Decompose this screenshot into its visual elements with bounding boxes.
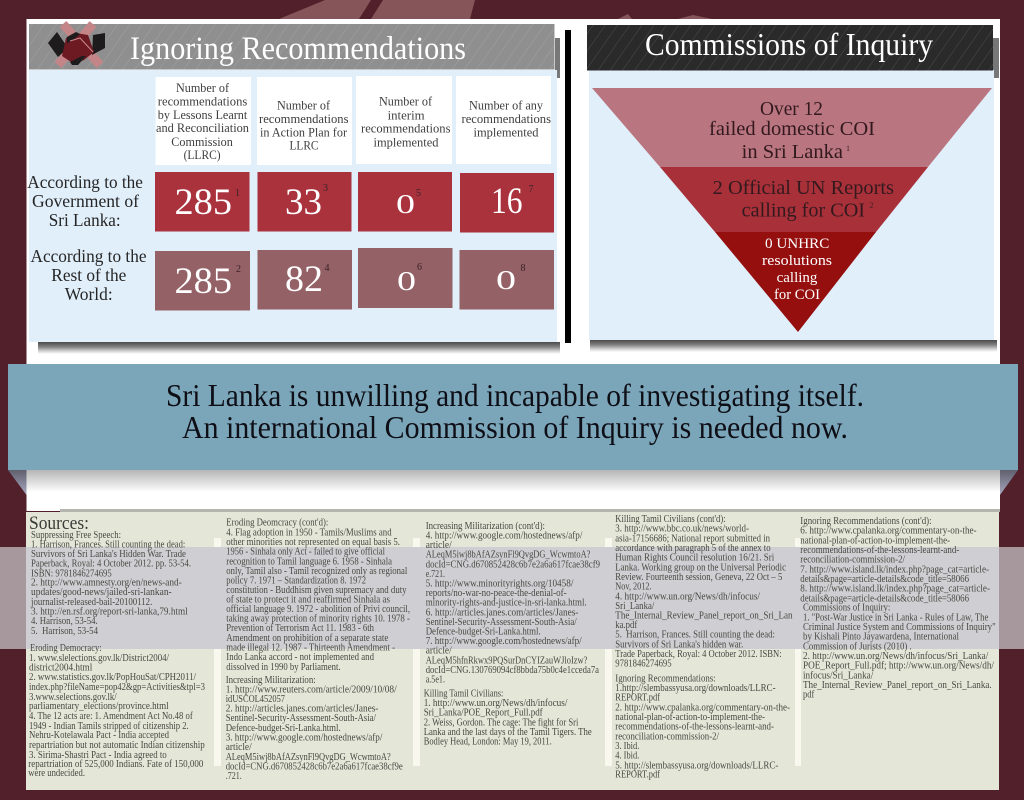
- sources column 3: minority-rights-and-justice-in-sri-lanka.html.: [426, 598, 587, 609]
- black divider: [565, 30, 571, 343]
- sources column 3: Increasing Militarization (cont'd):: [426, 521, 545, 532]
- sources column 4: 4. http://www.un.org/News/dh/infocus/: [615, 591, 760, 602]
- sources column 4: 5. Harrison, Frances. Still counting the dead:: [615, 630, 775, 641]
- sources column 4: Nov, 2012.: [615, 582, 652, 593]
- column header: action plan: recommendations: [259, 111, 348, 126]
- column header: action plan: LLRC: [290, 138, 318, 153]
- sources column 1: Eroding Democracy:: [30, 643, 102, 654]
- sources column 1: 4. The 12 acts are: 1. Amendment Act No.48 of: [29, 711, 193, 722]
- sources column 1: were undecided.: [28, 768, 85, 779]
- values row: government: 33: [285, 182, 322, 223]
- sources column 3: 1. http://www.un.org/News/dh/infocus/: [424, 698, 568, 709]
- column header: any implemented: [462, 97, 551, 139]
- sources column 1: 1. www.slelections.gov.lk/District2004/: [29, 653, 169, 664]
- sources column 2: Sentinel-Security-Assessment-South-Asia/: [226, 713, 376, 724]
- values row: government: 7: [528, 184, 534, 195]
- sources column 2: of state to protect it and reaffirmed Sinhala as: [226, 594, 390, 605]
- sources column 1: repartriation of 525,000 Indians. Fate of 150,000: [28, 759, 203, 770]
- sources column 4: 1.http://slembassyusa.org/downloads/LLRC-: [615, 683, 776, 694]
- row label: rest of the world: [30, 246, 147, 304]
- funnel: top tier: [592, 88, 992, 167]
- panel: ignoring recommendations: [27, 24, 560, 354]
- panel: sources: [26, 509, 1000, 790]
- sources column 3: docId=CNG.130769094cf8bbda75b0c4e1cceda7a: [426, 665, 599, 676]
- funnel: bottom tier: calling: [777, 270, 817, 286]
- ribbon fold: right: [1000, 470, 1018, 495]
- column header: LLRC recommendations: recommendations: [158, 93, 247, 108]
- sources column 1: journalist-released-bail-20100112.: [30, 597, 152, 608]
- column header: action plan: in Action Plan for: [260, 124, 348, 139]
- side bands: [0, 547, 1024, 649]
- sources column 1: district2004.html: [29, 663, 92, 674]
- sources column 1: 1. Harrison, Frances. Still counting the dead:: [31, 540, 185, 550]
- values row: government: [155, 172, 554, 232]
- funnel: bottom tier: for COI: [774, 287, 820, 303]
- values row: rest of the world: 285: [174, 261, 232, 302]
- sources column 4: [615, 514, 793, 781]
- column header: LLRC recommendations: (LLRC): [184, 147, 221, 162]
- sources column 4: Killing Tamil Civilians (cont'd):: [615, 514, 726, 525]
- sources column 1: 2. www.statistics.gov.lk/PopHouSat/CPH2011/: [29, 672, 196, 683]
- heading: commissions of inquiry: Commissions of Inquiry: [645, 26, 933, 62]
- sources column 3: 2. Weiss, Gordon. The cage: The fight for Sri: [424, 717, 579, 728]
- sources column 1: ISBN: 9781846274695: [31, 568, 112, 579]
- sources column 4: recommendations-of-the-lessons-learnt-and-: [615, 722, 774, 733]
- values row: rest of the world: 0: [496, 265, 516, 295]
- sources column 5: Commissions of Inquiry:: [803, 603, 890, 614]
- top background shapes: [279, 0, 712, 19]
- sources column 4: asia-17156686; National report submitted in: [615, 533, 770, 544]
- sources column 2: idUSCOL452057: [226, 694, 285, 705]
- sources column 4: Review. Fourteenth session, Geneva, 22 Oct – 5: [615, 572, 782, 583]
- column headers: [156, 76, 551, 165]
- values row: rest of the world: 4: [324, 263, 330, 274]
- sources column 2: 4. Flag adoption in 1950 - Tamils/Muslims and: [226, 527, 392, 538]
- column header: interim: recommendations: [361, 121, 450, 136]
- sources column 2: Prevention of Terrorism Act 11. 1983 - 6th: [226, 623, 375, 634]
- callout banner: Sri Lanka is unwilling and incapable of investigating itself.: [166, 377, 864, 413]
- column header: interim: interim: [388, 107, 425, 122]
- sources column 4: Survivors of Sri Lanka's hidden war.: [615, 639, 743, 650]
- sources column 4: Lanka. Working group on the Universal Periodic: [615, 562, 786, 573]
- sources column 5: infocus/Sri_Lanka/: [803, 670, 873, 681]
- sources column 5: POE_Report_Full.pdf; http://www.un.org/News/dh/: [803, 661, 994, 672]
- sources column 1: 1949 - Indian Tamils stripped of citizenship 2.: [29, 721, 189, 732]
- sources column 4: 2. http://www.cpalanka.org/commentary-on-the-: [615, 702, 790, 713]
- funnel: top tier: Over 12: [760, 98, 823, 120]
- column header: LLRC recommendations: Commission: [171, 134, 233, 149]
- sources column 5: 6. http://www.cpalanka.org/commentary-on-the-: [800, 526, 977, 537]
- sources column 1: 5. Harrison, 53-54: [31, 626, 98, 637]
- sources column 2: 2. http://articles.janes.com/articles/Janes-: [226, 704, 379, 715]
- column header: any implemented: recommendations: [462, 111, 551, 126]
- sources column 5: Commission of Jurists (2010) .: [803, 641, 912, 652]
- values row: rest of the world: 2: [236, 264, 241, 275]
- values row: government: 3: [323, 183, 328, 194]
- row label: government: Sri Lanka:: [49, 210, 121, 230]
- values row: rest of the world: [155, 248, 554, 310]
- sources column 1: 3.www.selections.gov.lk/: [29, 692, 117, 703]
- sources column 3: article/: [426, 646, 452, 657]
- sources column 2: Indo Lanka accord - not implemented and: [226, 652, 375, 663]
- sources column 5: national-plan-of-action-to-implement-the-: [800, 535, 950, 546]
- sources column 2: taking away protection of minority rights 10. 1978 -: [226, 614, 410, 625]
- sources column 5: [800, 516, 996, 701]
- sources column 1: 4. Harrison, 53-54.: [31, 616, 98, 627]
- sources column 5: 7. http://www.island.lk/index.php?page_cat=article-: [800, 564, 989, 575]
- sources column 1: updates/good-news/jailed-sri-lankan-: [31, 587, 172, 598]
- sources column 4: ka.pdf: [615, 620, 638, 631]
- sources column 1: parliamentary_elections/province.html: [29, 701, 169, 712]
- sources column 4: 5. http://slembassyusa.org/downloads/LLRC-: [615, 760, 779, 771]
- sources column 3: Lanka and the last days of the Tamil Tigers. The: [424, 727, 592, 738]
- sources column 3: a.5e1.: [426, 675, 445, 686]
- row label: rest of the world: Rest of the: [51, 265, 126, 285]
- sources column 4: REPORT.pdf: [615, 693, 660, 704]
- sources column 4: accordance with paragraph 5 of the annex to: [615, 543, 771, 554]
- row label: rest of the world: According to the: [30, 246, 147, 266]
- funnel: top tier: in Sri Lanka: [742, 141, 843, 163]
- icon: crossed handshake: [48, 24, 105, 65]
- row label: government: According to the: [27, 172, 143, 192]
- sources column 3: Killing Tamil Civilians:: [424, 688, 504, 699]
- funnel: top tier: failed domestic COI: [709, 118, 875, 140]
- sources column 1: Nehru-Kotelawala Pact - India accepted: [29, 730, 170, 741]
- sources column 2: official language 9. 1972 - abolition of Privi council,: [226, 604, 410, 615]
- values row: government: 16: [491, 181, 522, 222]
- sources column 2: Increasing Militarization:: [226, 675, 316, 686]
- sources column 4: Trade Paperback, Royal: 4 October 2012. ISBN:: [615, 649, 782, 660]
- sources column 3: docId=CNG.d670852428c6b7e2a6a617fcae38cf9: [426, 559, 600, 570]
- sources column 1: Paperback, Royal: 4 October 2012. pp. 53-54.: [31, 559, 191, 570]
- sources column 5: details&page=article-details&code_title=58066: [800, 574, 969, 585]
- sources column 3: Bodley Head, London: May 19, 2011.: [424, 737, 552, 748]
- sources column 3: e.721.: [426, 569, 445, 580]
- heading: sources: Sources:: [29, 513, 89, 534]
- ribbon shadow: [26, 470, 1000, 492]
- white page sheet: [26, 19, 1000, 511]
- sources column 2: dissolved in 1990 by Parliament.: [226, 662, 341, 673]
- sources column 5: reconciliation-commission-2/: [800, 555, 905, 566]
- column header: interim: [361, 94, 450, 149]
- values row: government: 0: [396, 189, 415, 219]
- sources column 2: other minorities not represented on equal basis 5.: [226, 537, 400, 548]
- callout banner: [8, 364, 1018, 470]
- sources column 1: Survivors of Sri Lanka's Hidden War. Trade: [31, 549, 186, 560]
- sources column 3: ALeqM5iwj8bAfAZsynFl9QvgDG_WcwmtoA?: [426, 550, 591, 561]
- sources column 2: 1956 - Sinhala only Act - failed to give official: [226, 547, 385, 558]
- sources column 4: national-plan-of-action-to-implement-the-: [615, 712, 765, 723]
- sources column 3: 5. http://www.minorityrights.org/10458/: [426, 578, 574, 589]
- sources column 5: recommendations-of-the-lessons-learnt-and-: [800, 545, 960, 556]
- values row: rest of the world: 82: [285, 259, 323, 300]
- funnel: bottom tier: resolutions: [762, 253, 832, 269]
- ribbon fold: left: [8, 470, 26, 495]
- column header: interim: implemented: [374, 134, 439, 149]
- sources column 4: 3. Ibid.: [615, 741, 639, 752]
- sources column 2: policy 7. 1971 – Standardization 8. 1972: [226, 575, 366, 586]
- sources column 2: 1. http://www.reuters.com/article/2009/10/08/: [226, 684, 397, 695]
- sources column 2: docId=CNG.d670852428c6b7e2a6a617fcae38cf9e: [226, 762, 403, 773]
- heading: ignoring recommendations: [29, 24, 554, 70]
- sources column 3: [424, 521, 600, 748]
- sources column 5: Ignoring Recommendations (cont'd):: [800, 516, 932, 527]
- values row: government: 5: [416, 188, 421, 199]
- sources column 3: 4. http://www.google.com/hostednews/afp/: [426, 531, 583, 542]
- sources column 5: 2. http://www.un.org/News/dh/infocus/Sri_Lanka/: [803, 651, 988, 662]
- sources column 3: article/: [426, 540, 452, 551]
- sources column 4: Sri_Lanka/: [615, 601, 654, 612]
- column header: LLRC recommendations: by Lessons Learnt: [158, 107, 248, 122]
- sources column 2: only, Tamil also - Tamil recognized only as regional: [226, 566, 407, 577]
- column header: LLRC recommendations: Number of: [176, 80, 230, 95]
- column header: LLRC recommendations: and Reconciliation: [156, 120, 249, 135]
- sources column 5: 8. http://www.island.lk/index.php?page_cat=article-: [800, 584, 990, 595]
- funnel: middle tier: 2: [870, 201, 874, 210]
- funnel: middle tier: calling for COI: [742, 200, 865, 222]
- sources column 1: 2. http://www.amnesty.org/en/news-and-: [31, 578, 182, 589]
- sources column 2: Defence-budget-Sri-Lanka.html.: [226, 723, 341, 734]
- sources column 5: details&page=article-details&code_title=58066: [800, 593, 969, 604]
- column header: interim: Number of: [379, 94, 433, 109]
- funnel: bottom tier: [715, 232, 876, 332]
- row label: government: [27, 172, 143, 230]
- sources column 2: recognition to Tamil language 6. 1958 - Sinhala: [226, 556, 392, 567]
- funnel: middle tier: 2 Official UN Reports: [713, 177, 894, 199]
- sources column 4: Ignoring Recommendations:: [615, 673, 716, 684]
- values row: government: 1: [235, 188, 240, 199]
- sources column 2: 3. http://www.google.com/hostednews/afp/: [226, 733, 383, 744]
- sources column 5: pdf: [803, 690, 815, 701]
- sources column 3: Sentinel-Security-Assessment-South-Asia/: [426, 617, 577, 628]
- row label: rest of the world: World:: [65, 284, 113, 304]
- values row: rest of the world: 6: [417, 262, 422, 273]
- sources column 2: constitution - Buddhism given supremacy and duty: [226, 585, 407, 596]
- funnel: middle tier: [660, 167, 928, 232]
- column header: any implemented: Number of any: [469, 97, 543, 112]
- column header: any implemented: implemented: [474, 124, 539, 139]
- sources column 5: 1. "Post-War Justice in Sri Lanka - Rules of Law, The: [803, 612, 989, 623]
- sources column 2: article/: [226, 742, 252, 753]
- column header: action plan: Number of: [277, 98, 331, 113]
- sources column 3: 7. http://www.google.com/hostednews/afp/: [426, 636, 582, 647]
- sources column 4: REPORT.pdf: [615, 770, 660, 781]
- sources column 5: The_Internal_Review_Panel_report_on_Sri_Lanka.: [803, 680, 992, 691]
- values row: government: 285: [174, 182, 232, 223]
- sources column 4: 4. Ibid.: [615, 751, 639, 762]
- funnel: top tier: 1: [846, 144, 850, 153]
- sources column 4: 9781846274695: [615, 659, 672, 670]
- sources column 2: Eroding Deomcracy (cont'd):: [226, 518, 328, 529]
- heading: commissions of inquiry: [587, 25, 993, 70]
- sources column 5: Criminal Justice System and Commissions of Inquiry": [803, 622, 996, 633]
- callout banner: An international Commission of Inquiry is needed now.: [182, 409, 848, 445]
- sources column 3: reports/no-war-no-peace-the-denial-of-: [426, 588, 567, 599]
- sources column 1: index.php?fileName=pop42&gp=Activities&tpl=3: [29, 682, 205, 693]
- sources column 2: .721.: [226, 771, 242, 782]
- sources column 5: by Kishali Pinto Jayawardena, International: [803, 632, 959, 643]
- heading: ignoring recommendations: Ignoring Recommendations: [130, 31, 466, 67]
- sources column 1: [28, 530, 205, 779]
- sources column 2: made illegal 12. 1987 - Thirteenth Amendment -: [226, 643, 395, 654]
- sources column 4: reconciliation-commission-2/: [615, 731, 719, 742]
- sources column 1: 3. Sirima-Shastri Pact - India agreed to: [29, 750, 167, 761]
- sources column 4: 3. http://www.bbc.co.uk/news/world-: [615, 524, 749, 535]
- sources column 3: Defence-budget-Sri-Lanka.html.: [426, 626, 541, 637]
- row label: government: Government of: [32, 191, 139, 211]
- sources column 4: The_Internal_Review_Panel_report_on_Sri_Lan: [615, 610, 793, 621]
- sources column 4: Human Rights Council resolution 16/21. Sri: [615, 553, 774, 564]
- values row: rest of the world: 0: [397, 266, 416, 296]
- sources column 2: Amendment on prohibition of a separate state: [226, 633, 389, 644]
- column header: action plan: [259, 98, 348, 153]
- sources column 3: 6. http://articles.janes.com/articles/Janes-: [426, 607, 579, 618]
- sources column 2: [226, 518, 410, 782]
- sources column 3: Sri_Lanka/POE_Report_Full.pdf: [424, 708, 543, 719]
- column header: LLRC recommendations: [156, 80, 249, 162]
- values row: rest of the world: 8: [520, 263, 526, 274]
- sources column 1: 3. http://en.rsf.org/report-sri-lanka,79.html: [31, 607, 188, 618]
- sources column 3: ALeqM5hfnRkwx9PQSurDnCYIZauWJloIzw?: [426, 655, 588, 666]
- sources column 2: ALeqM5iwj8bAfAZsynFl9QvgDG_WcwmtoA?: [226, 752, 391, 763]
- panel: commissions of inquiry: [587, 25, 999, 352]
- funnel: bottom tier: 0 UNHRC: [765, 236, 829, 252]
- sources column 1: Suppressing Free Speech:: [31, 530, 121, 541]
- sources column 1: repartriation but not automatic Indian citizenship: [29, 740, 205, 751]
